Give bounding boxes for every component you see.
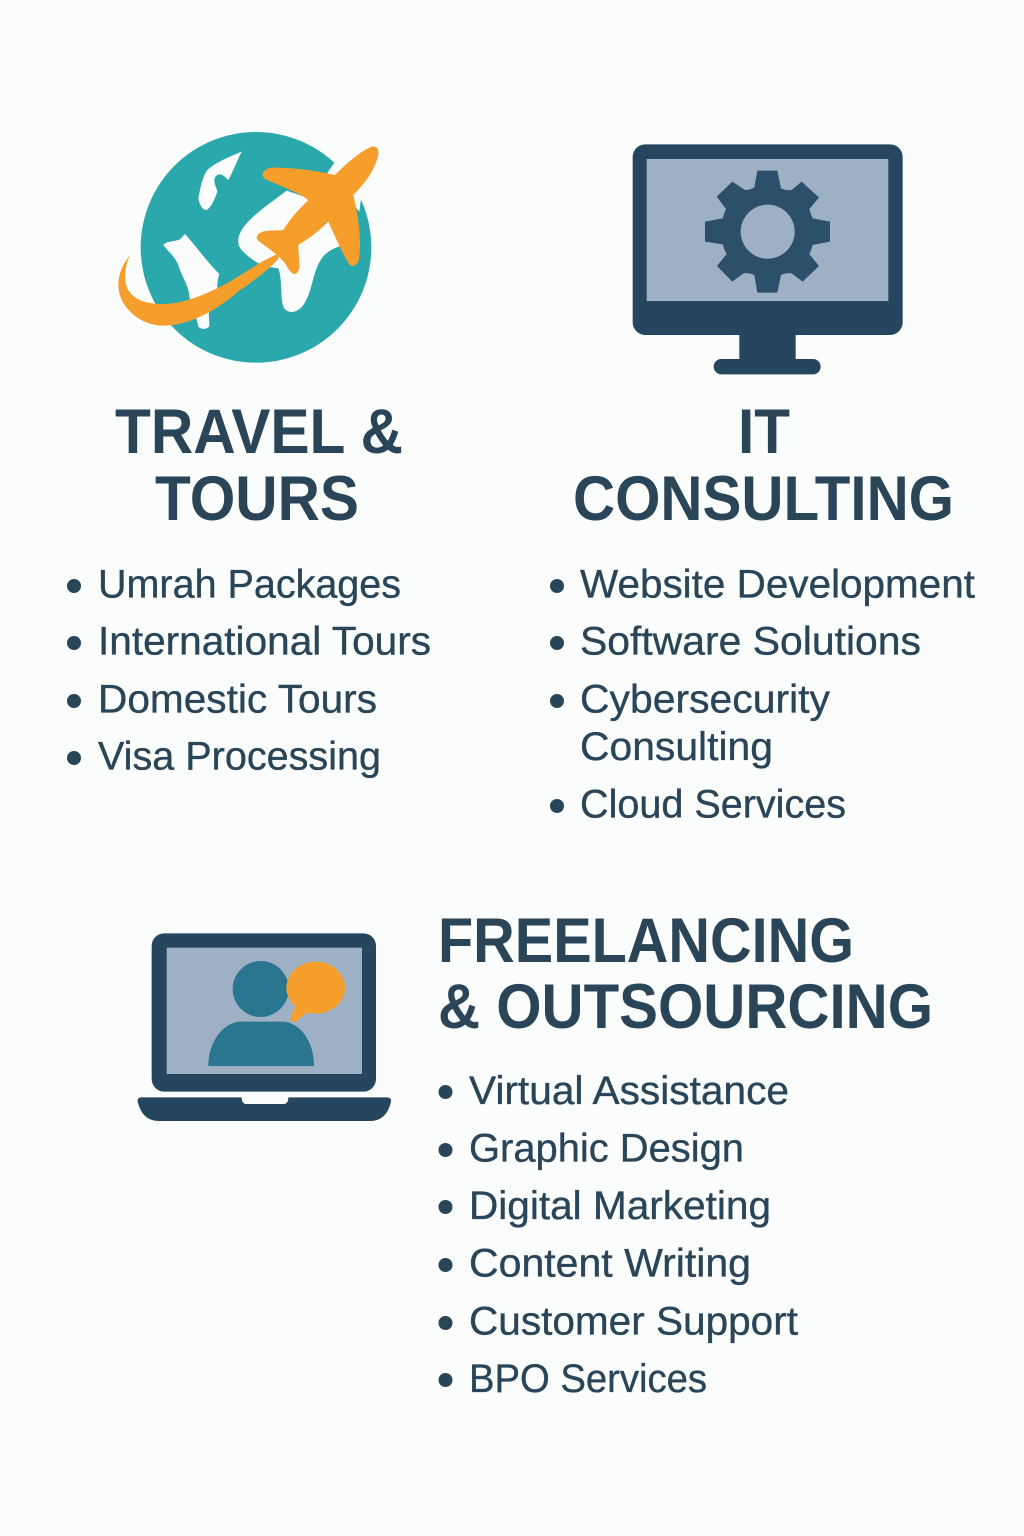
panel: IT consulting [550,144,975,826]
heading: IT consulting: CONSULTING [573,464,954,534]
list: IT services: Website Development [580,562,975,606]
list: freelancing services [438,1069,798,1401]
heading: IT consulting: IT [738,397,790,467]
list: freelancing services: Virtual Assistance [469,1069,789,1113]
list: travel services [67,562,431,778]
list: freelancing services: Customer Support [469,1300,798,1344]
heading: freelancing and outsourcing [438,906,933,1042]
panel: freelancing and outsourcing [138,906,933,1401]
heading: travel and tours: TOURS [155,464,359,534]
list: travel services: Visa Processing [98,734,381,778]
icon: globe with airplane [118,132,387,363]
heading: freelancing and outsourcing: FREELANCING [438,906,854,976]
heading: IT consulting [573,397,954,534]
heading: freelancing and outsourcing: & OUTSOURCING [438,972,933,1042]
list: IT services: Cybersecurity [580,678,830,722]
heading: travel and tours: TRAVEL & [115,397,403,467]
list: freelancing services: Graphic Design [469,1126,744,1170]
icon: monitor with gear [633,144,903,374]
list: IT services: Cloud Services [580,782,846,826]
list: travel services: Domestic Tours [98,678,377,722]
icon: laptop with person and speech bubble [138,933,391,1121]
list: freelancing services: BPO Services [469,1357,707,1401]
list: travel services: Umrah Packages [98,562,401,606]
list: freelancing services: Digital Marketing [469,1184,771,1228]
list: IT services: Software Solutions [580,620,921,664]
list: freelancing services: Content Writing [469,1242,751,1286]
list: IT services: Consulting [580,725,773,769]
list: IT services [550,562,975,826]
list: travel services: International Tours [98,620,431,664]
heading: travel and tours [115,397,403,534]
panel: travel and tours [67,132,431,778]
